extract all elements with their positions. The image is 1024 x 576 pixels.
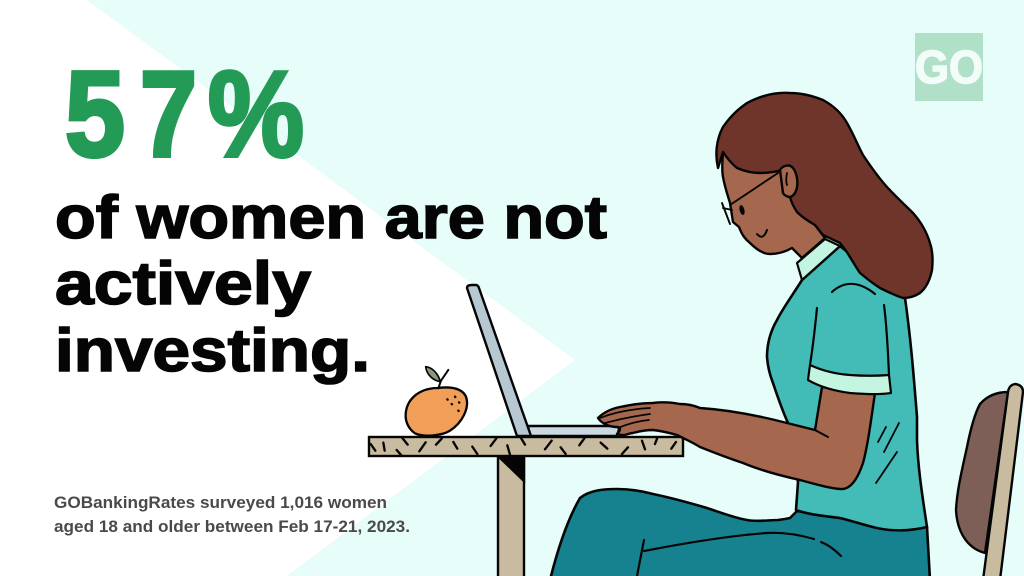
illustration: table leg [498, 457, 524, 576]
illustration: laptop [467, 285, 620, 436]
illustration: glasses [722, 173, 778, 224]
illustration: chair [956, 384, 1023, 576]
heading: of women are not actively investing: investing. [55, 317, 370, 384]
headline statistic: 57%: % [208, 46, 304, 182]
source note: GOBankingRates surveyed 1,016 women [54, 494, 387, 512]
heading: of women are not actively investing [55, 184, 607, 384]
headline statistic: 57%: 7 [140, 46, 197, 182]
illustration: hair [716, 93, 933, 298]
heading: of women are not actively investing: of women are not [55, 184, 607, 251]
logo: GO: GO [915, 41, 983, 93]
illustration: shirt collar [797, 239, 840, 280]
illustration: ear [780, 166, 797, 197]
source note [54, 494, 410, 536]
illustration: shirt cuff [808, 365, 891, 394]
illustration: neck and face [722, 152, 825, 258]
headline statistic: 57% [65, 46, 304, 182]
source note: aged 18 and older between Feb 17-21, 2023. [54, 518, 410, 536]
illustration: arm and hand [598, 387, 875, 489]
illustration: legs [550, 489, 930, 576]
illustration: orange [406, 367, 467, 436]
illustration: shirt [767, 246, 927, 530]
illustration: table top [369, 437, 683, 456]
headline statistic: 57%: 5 [65, 46, 125, 182]
heading: of women are not actively investing: actively [55, 250, 312, 317]
